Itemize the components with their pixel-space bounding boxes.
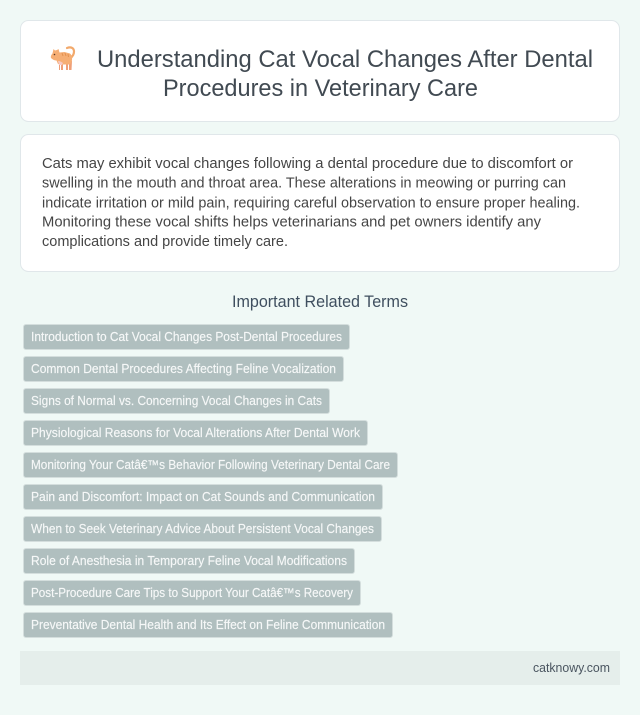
text block: description: Monitoring these vocal shifts helps veterinarians and pet owners identify any xyxy=(42,214,541,230)
text block: description: swelling in the mouth and throat area. These alterations in meowing or purring can xyxy=(42,174,566,192)
panel: title card xyxy=(20,20,620,122)
chip 10: Preventative Dental Health and Its Effect on Feline Communication xyxy=(31,618,385,632)
chip 2: Common Dental Procedures Affecting Feline Vocalization xyxy=(31,362,336,376)
chip 9 xyxy=(24,580,360,606)
chip 5 xyxy=(24,452,398,478)
chip 4 xyxy=(24,420,368,446)
heading: related terms: Important Related Terms xyxy=(232,293,408,311)
title xyxy=(97,46,593,102)
chip 8 xyxy=(24,548,354,574)
chip 3: Signs of Normal vs. Concerning Vocal Changes in Cats xyxy=(31,394,322,408)
text block: description: Cats may exhibit vocal changes following a dental procedure due to discomfort or xyxy=(42,155,573,172)
text block: description xyxy=(42,155,580,250)
icon: cat xyxy=(51,47,74,70)
chip 8: Role of Anesthesia in Temporary Feline Vocal Modifications xyxy=(31,554,347,568)
panel: description card xyxy=(20,134,620,272)
chip 4: Physiological Reasons for Vocal Alterations After Dental Work xyxy=(31,426,361,440)
chip 7: When to Seek Veterinary Advice About Persistent Vocal Changes xyxy=(31,522,374,536)
chip 1 xyxy=(24,324,350,350)
list: related term chips xyxy=(24,324,398,638)
chip 7 xyxy=(24,516,382,542)
footer: catknowy.com xyxy=(533,660,610,675)
chip 10 xyxy=(24,612,392,638)
footer xyxy=(20,651,620,685)
chip 9: Post-Procedure Care Tips to Support Your Catâ€™s Recovery xyxy=(31,586,354,600)
text block: description: indicate irritation or mild pain, requiring careful observation to ensure proper healing. xyxy=(42,194,580,212)
title: Understanding Cat Vocal Changes After Dental xyxy=(97,46,593,73)
chip 1: Introduction to Cat Vocal Changes Post-Dental Procedures xyxy=(31,330,342,344)
title: Procedures in Veterinary Care xyxy=(163,75,478,102)
chip 5: Monitoring Your Catâ€™s Behavior Following Veterinary Dental Care xyxy=(31,458,390,472)
chip 6: Pain and Discomfort: Impact on Cat Sounds and Communication xyxy=(31,490,375,504)
chip 6 xyxy=(24,484,382,510)
chip 3 xyxy=(24,388,330,414)
chip 2 xyxy=(24,356,344,382)
text block: description: complications and provide timely care. xyxy=(42,233,288,250)
